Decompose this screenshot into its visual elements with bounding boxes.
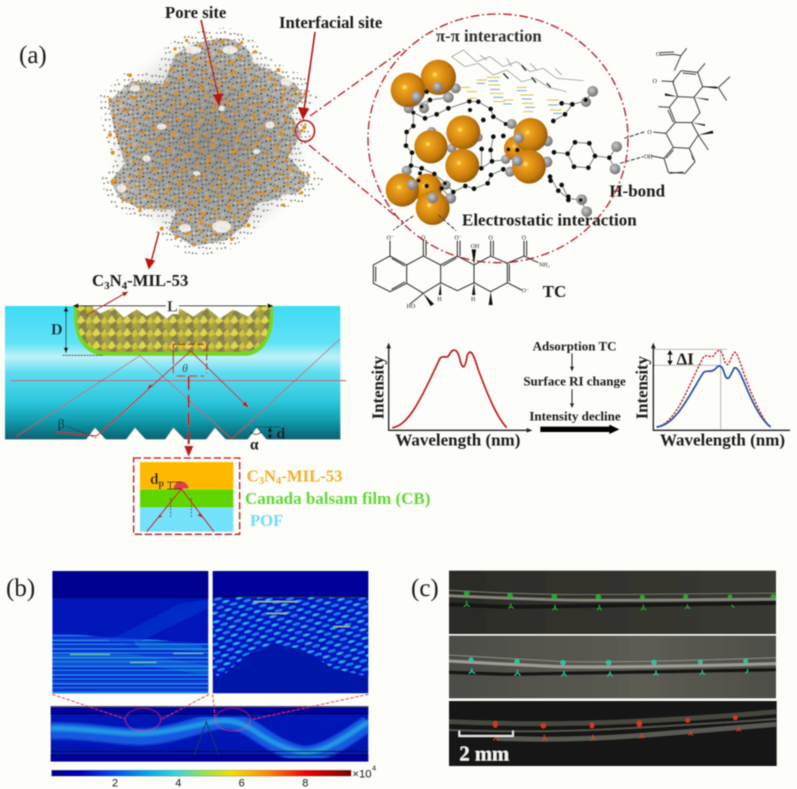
tetracycline molecule: TC: O⁻ xyxy=(454,235,462,241)
tetracycline molecule: TC: O xyxy=(522,235,527,241)
panel c: fiber photographs xyxy=(411,571,777,766)
panel b: simulated light-field heat maps xyxy=(6,571,376,789)
label: electrostatic interaction: Electrostatic interaction xyxy=(462,211,637,230)
fiber body xyxy=(5,306,340,439)
legend: C3N4-MIL-53: N xyxy=(264,467,276,486)
color bar xyxy=(52,764,376,789)
heat map: left magnified view xyxy=(52,571,208,693)
tetracycline molecule: TC: O⁻ xyxy=(522,288,529,294)
chart: spectrum after adsorption: Intensity xyxy=(632,355,651,419)
scale label: 2 mm xyxy=(459,743,509,765)
dashed selection box and downward arrow xyxy=(173,344,207,457)
label: C3N4-MIL-53: C xyxy=(92,271,104,290)
spectra and mechanism flow xyxy=(368,338,790,449)
label: C3N4-MIL-53: 3 xyxy=(104,280,110,292)
heat map: right magnified view xyxy=(213,571,368,693)
panel label b: (b) xyxy=(6,575,35,602)
panel label c: (c) xyxy=(411,575,439,602)
dimension D xyxy=(51,306,103,355)
photo: cyan light fiber xyxy=(449,636,776,698)
chart: spectrum after adsorption xyxy=(632,343,790,449)
scale bar xyxy=(459,731,513,736)
legend: C3N4-MIL-53: -MIL-53 xyxy=(281,467,342,486)
angle beta: β xyxy=(58,417,65,432)
label: C3N4-MIL-53: 4 xyxy=(122,280,128,292)
label: C3N4-MIL-53: N xyxy=(110,271,122,290)
groove with C3N4-MIL-53 coating xyxy=(73,306,273,356)
inset: evanescent wave layers: d xyxy=(150,471,159,488)
C3N4-MIL-53 molecular cluster xyxy=(103,33,316,252)
graphene-like sheets xyxy=(452,50,583,113)
tetracycline molecule: upper right xyxy=(644,48,730,173)
arrow: to C3N4-MIL-53 label xyxy=(146,232,159,268)
panel label a: (a) xyxy=(19,42,47,69)
notch dimensions d and alpha: d xyxy=(276,425,285,442)
tetracycline molecule: TC: NH₂ xyxy=(539,262,550,268)
legend: C3N4-MIL-53: C xyxy=(247,467,259,486)
hydrogen bond dashes xyxy=(393,132,645,231)
label: interfacial site: Interfacial site xyxy=(279,13,382,32)
tetracycline molecule: TC: OH xyxy=(471,244,480,250)
arrow: interfacial site xyxy=(299,32,315,118)
dimension L xyxy=(73,299,273,316)
label: TC: TC xyxy=(543,282,566,301)
arrow: pore site xyxy=(201,20,222,105)
inset: evanescent wave layers xyxy=(134,458,240,534)
flow: adsorption to intensity decline: Intensity decline xyxy=(529,409,621,424)
label: pore site: Pore site xyxy=(165,3,226,22)
photo: red light fiber xyxy=(449,701,777,766)
panel a: adsorption mechanism and fiber sensor xyxy=(5,3,790,534)
color bar: 4 xyxy=(372,764,376,773)
tetracycline molecule: upper right: O xyxy=(653,79,658,85)
chart: spectrum after adsorption: Wavelength (nm) xyxy=(660,430,785,449)
tetracycline molecule: TC: O xyxy=(488,235,493,241)
dash-dot zoom circle xyxy=(368,14,628,263)
tetracycline molecule: upper right: OH xyxy=(644,154,653,160)
red arrow from D to label xyxy=(86,292,128,316)
fiber cross-section with D-shaped groove xyxy=(5,292,430,534)
label: pi-pi interaction: π-π interaction xyxy=(436,26,542,45)
heat map: full fiber view xyxy=(51,706,368,762)
dashed red connector lines xyxy=(52,694,368,720)
label: H-bond: H-bond xyxy=(609,181,666,200)
foreground gray atoms xyxy=(407,82,524,203)
tetracycline molecule: TC: O xyxy=(421,235,426,241)
tetracycline molecule: TC: H xyxy=(471,297,476,303)
chart: initial spectrum: Intensity xyxy=(368,355,387,419)
chart: initial spectrum xyxy=(368,343,532,449)
interfacial site circle xyxy=(296,120,314,142)
angle beta xyxy=(58,417,97,438)
light rays xyxy=(10,339,346,439)
photo: green light fiber xyxy=(449,571,776,634)
inset: evanescent wave layers: p xyxy=(159,479,165,490)
notch dimensions d and alpha xyxy=(250,425,285,453)
color bar: ×10 xyxy=(352,768,372,780)
flow: adsorption to intensity decline: Adsorption TC xyxy=(533,338,616,353)
notches on fiber bottom xyxy=(86,428,267,440)
dimension D: D xyxy=(51,322,63,339)
black carbon atoms xyxy=(404,89,612,202)
orange metal spheres xyxy=(386,60,548,225)
tetracycline molecule: upper right: O xyxy=(656,52,661,58)
legend: Canada balsam film: Canada balsam film (CB) xyxy=(245,489,430,508)
dimension L: L xyxy=(167,299,178,316)
legend: C3N4-MIL-53: 3 xyxy=(259,476,264,487)
flow: adsorption to intensity decline xyxy=(523,338,626,434)
tetracycline molecule: TC xyxy=(373,235,550,310)
magnified view: interactions xyxy=(368,14,730,310)
metal-organic framework bonds xyxy=(408,87,548,198)
notch dimensions d and alpha: α xyxy=(250,436,259,453)
label: C3N4-MIL-53: -MIL-53 xyxy=(127,271,188,290)
legend: C3N4-MIL-53: 4 xyxy=(276,476,282,487)
tetracycline molecule: TC: HO xyxy=(407,304,416,310)
zoom connector lines xyxy=(309,49,404,222)
tetracycline molecule: upper right: O xyxy=(647,130,652,136)
gray atoms xyxy=(402,82,622,217)
angle theta: θ xyxy=(182,361,188,375)
chart: spectrum after adsorption: ΔI xyxy=(677,350,694,369)
flow: adsorption to intensity decline: Surface RI change xyxy=(523,374,626,389)
tetracycline molecule: TC: O⁻ xyxy=(387,235,394,241)
big arrow xyxy=(540,425,619,434)
tetracycline molecule: TC: H xyxy=(437,297,442,303)
legend: POF: POF xyxy=(250,511,283,530)
dotted red selection ellipses xyxy=(125,708,250,731)
chart: initial spectrum: Wavelength (nm) xyxy=(395,430,520,449)
